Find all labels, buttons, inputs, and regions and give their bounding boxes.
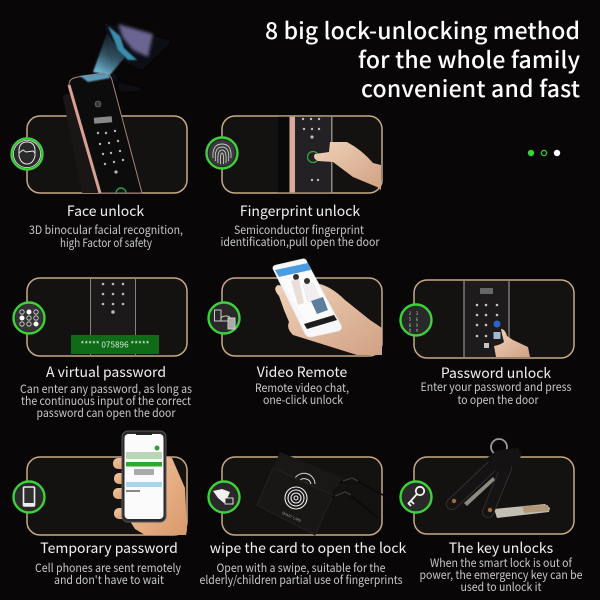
- keypad with green code bar: [71, 279, 159, 355]
- text: temporary password: and don't have to wait: [54, 572, 165, 588]
- text: fingerprint unlock: identification,pull open the door: [220, 234, 380, 250]
- icon: keypad numbers: 9: [416, 323, 419, 329]
- key set: [452, 439, 550, 518]
- text: password unlock: [420, 379, 572, 408]
- panel: key unlocks: [400, 439, 574, 534]
- title: for the whole family: [358, 41, 580, 75]
- icon: keypad numbers: 0: [409, 328, 412, 334]
- heading: temporary password: Temporary password: [40, 538, 178, 558]
- keypad with green code bar: ***** 075896 *****: [80, 338, 150, 350]
- text: fingerprint unlock: [220, 222, 380, 250]
- title: [265, 12, 580, 104]
- icon: card swipe: [208, 482, 240, 512]
- heading: video remote: Video Remote: [257, 362, 347, 382]
- text: temporary password: [35, 560, 181, 588]
- heading: virtual password: A virtual password: [46, 362, 166, 382]
- text: face unlock: high Factor of safety: [60, 235, 152, 251]
- keypad with fingertip: [464, 281, 530, 357]
- fingerprint cards: SMART CARD: [281, 511, 302, 524]
- face scan beam: [93, 23, 172, 92]
- text: key unlocks: used to unlock it: [460, 579, 542, 595]
- text: wipe the card: elderly/children partial use of fingerprints: [200, 572, 402, 588]
- panel: temporary password: [14, 431, 187, 535]
- icon: key: [400, 482, 432, 512]
- text: temporary password: Cell phones are sent remotely: [35, 560, 181, 576]
- icon: keypad numbers: #: [416, 328, 419, 334]
- panel: virtual password: [14, 278, 187, 356]
- title: convenient and fast: [361, 70, 580, 104]
- icon: keypad numbers: 6: [416, 317, 419, 323]
- heading: password unlock: Password unlock: [441, 363, 551, 383]
- text: video remote: [255, 380, 349, 408]
- heading: wipe the card: wipe the card to open the lock: [210, 538, 407, 558]
- icon: fingerprint: [206, 138, 238, 168]
- icon: keypad numbers: 2: [409, 311, 412, 317]
- carousel dots: [528, 150, 560, 156]
- panel: video remote: [208, 259, 382, 356]
- heading: fingerprint unlock: Fingerprint unlock: [240, 201, 360, 221]
- text: virtual password: the continuous input of the correct: [21, 393, 192, 409]
- smart lock front: [63, 73, 142, 193]
- icon: dot grid: [14, 302, 44, 334]
- text: wipe the card: Open with a swipe, suitable for the: [216, 560, 386, 576]
- hand holding phone: [273, 259, 382, 355]
- smart lock with finger: [278, 117, 381, 192]
- icon: keypad numbers: 8: [409, 323, 412, 329]
- text: password unlock: to open the door: [458, 392, 539, 408]
- panel: face unlock: [12, 23, 187, 193]
- text: video remote: Remote video chat,: [255, 380, 349, 396]
- fingerprint cards: [257, 452, 392, 535]
- icon: face: [12, 138, 42, 170]
- text: face unlock: [29, 222, 183, 251]
- panel: fingerprint unlock: [206, 116, 382, 193]
- icon: devices: [208, 302, 240, 334]
- text: virtual password: password can open the door: [36, 405, 176, 421]
- hand holding phone: [113, 431, 187, 535]
- icon: keypad numbers: [400, 304, 432, 336]
- text: fingerprint unlock: Semiconductor fingerprint: [234, 222, 365, 238]
- text: key unlocks: power, the emergency key can be: [420, 567, 582, 583]
- panel: wipe the card: [208, 452, 392, 535]
- text: password unlock: Enter your password and press: [420, 379, 572, 395]
- icon: keypad numbers: 5: [409, 317, 412, 323]
- text: virtual password: [20, 381, 192, 421]
- text: key unlocks: [420, 555, 582, 595]
- panel: password unlock: [400, 280, 574, 358]
- text: wipe the card: [200, 560, 402, 588]
- heading: key unlocks: The key unlocks: [449, 538, 554, 558]
- text: key unlocks: When the smart lock is out of: [430, 555, 573, 571]
- text: video remote: one-click unlock: [263, 392, 344, 408]
- icon: keypad numbers: 3: [416, 311, 419, 317]
- text: virtual password: Can enter any password, as long as: [20, 381, 192, 397]
- heading: face unlock: Face unlock: [67, 201, 144, 221]
- icon: phone: [14, 482, 44, 512]
- title: 8 big lock-unlocking method: [265, 12, 580, 46]
- text: face unlock: 3D binocular facial recognition,: [29, 222, 183, 238]
